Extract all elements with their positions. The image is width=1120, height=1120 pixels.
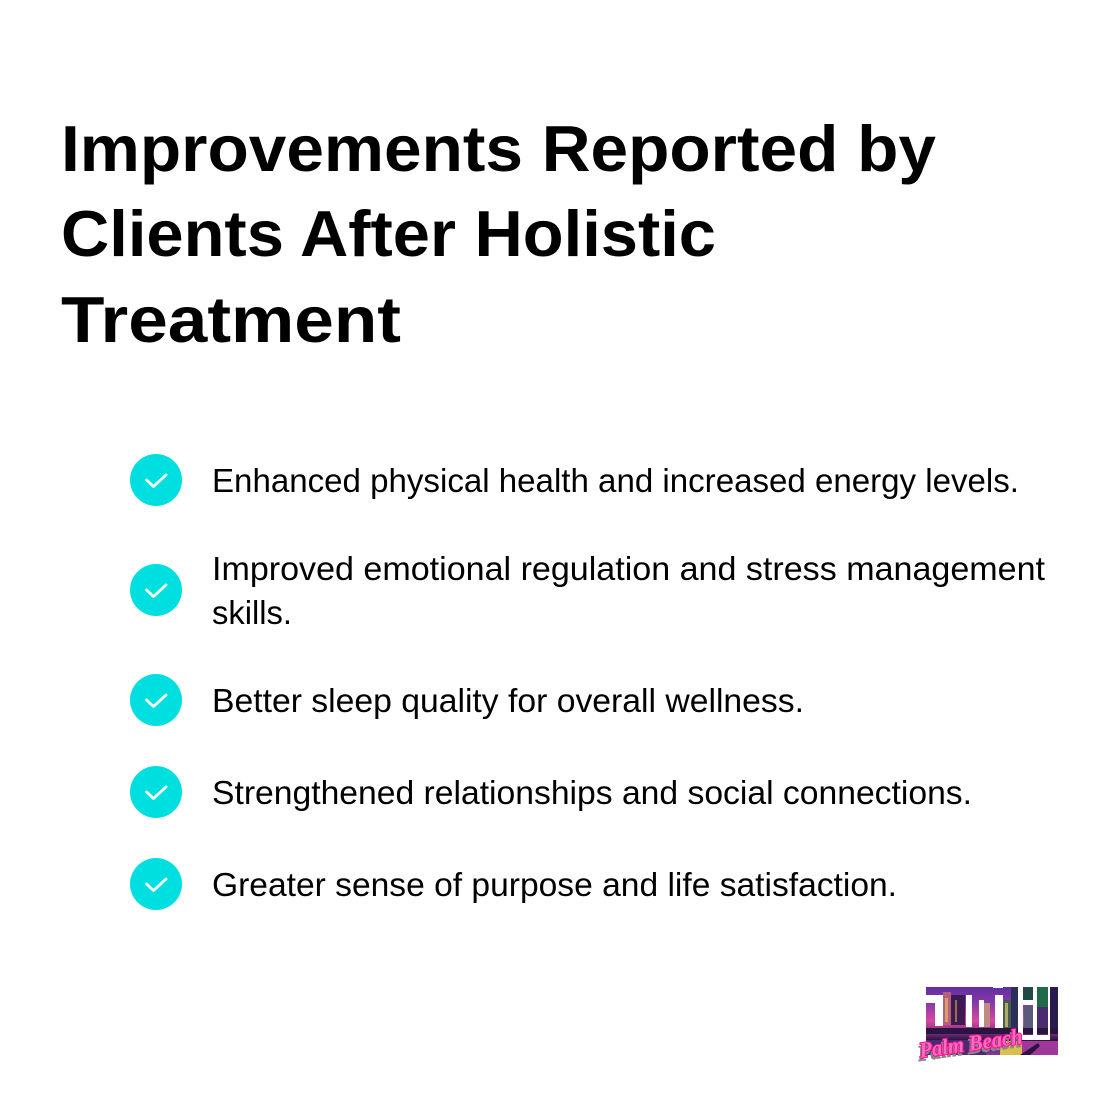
- icon: check badge 5: [130, 858, 182, 910]
- logo script: Palm Beach: Palm Beach: [915, 1027, 1022, 1066]
- white letter cuts: [926, 980, 1050, 1040]
- logo script: Palm Beach: Palm Beach: [917, 1023, 1024, 1063]
- title: Improvements Reported by: [61, 112, 936, 185]
- text: item 5: Greater sense of purpose and life satisfaction.: [212, 867, 897, 904]
- text: item 3: Better sleep quality for overall wellness.: [212, 683, 804, 720]
- icon: check badge 3: [130, 674, 182, 726]
- text: item 1: Enhanced physical health and increased energy levels.: [212, 463, 1019, 500]
- item 3: sleep quality: [130, 674, 804, 726]
- icon: check badge 4: [130, 766, 182, 818]
- text: item 2: skills.: [212, 595, 292, 632]
- item 4: relationships: [130, 766, 972, 818]
- item 1: physical health: [130, 454, 1019, 506]
- title: Treatment: [61, 283, 401, 356]
- icon: check badge 1: [130, 454, 182, 506]
- logo: Amitay Palm Beach: [915, 980, 1058, 1066]
- item 2: emotional regulation: [130, 551, 1046, 632]
- title: [61, 112, 936, 356]
- title: Clients After Holistic: [61, 197, 716, 270]
- list of improvements: [130, 454, 1046, 910]
- icon: check badge 2: [130, 564, 182, 616]
- item 5: purpose: [130, 858, 897, 910]
- text: item 2: Improved emotional regulation and stress management: [212, 551, 1046, 588]
- text: item 4: Strengthened relationships and social connections.: [212, 775, 972, 812]
- text: item 2: [212, 551, 1046, 632]
- skyline buildings: [926, 987, 1058, 1055]
